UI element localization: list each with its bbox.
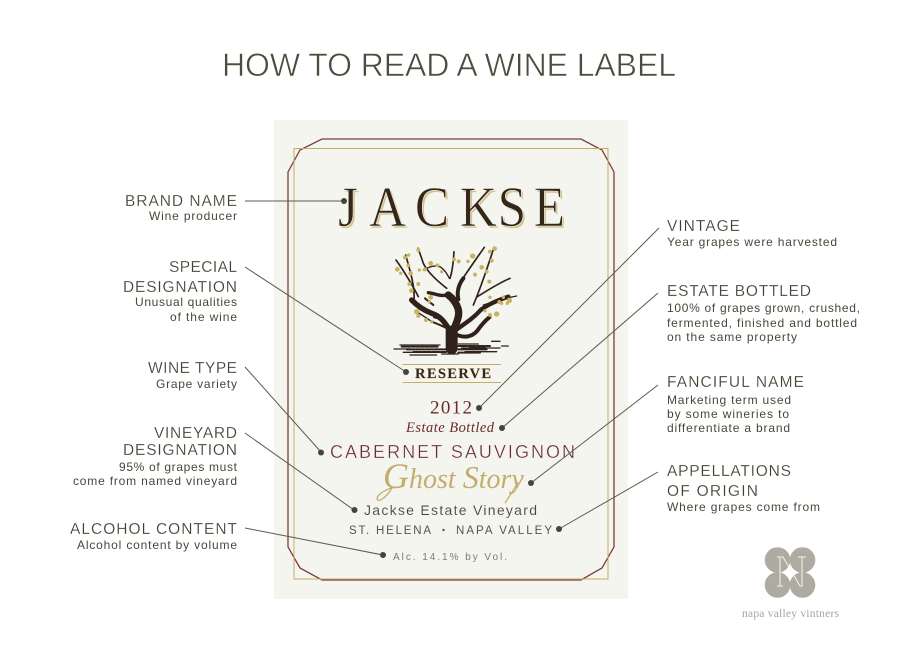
callout: fanciful name (528, 374, 804, 486)
callout: estate bottled: on the same property (667, 330, 797, 344)
callout: vintage (476, 218, 837, 411)
alcohol text: Alc. 14.1% by Vol. (393, 552, 507, 563)
wine type text: CABERNET SAUVIGNON (330, 442, 575, 462)
callout: estate bottled: 100% of grapes grown, crushed, (667, 301, 860, 315)
callout: wine type: Grape variety (156, 377, 237, 391)
callout: estate bottled: ESTATE BOTTLED (667, 283, 811, 300)
callout: vineyard designation: VINEYARD (154, 425, 237, 442)
callout: alcohol content: Alcohol content by volume (77, 538, 237, 552)
callout: alcohol content (70, 521, 386, 558)
callout: wine type (148, 360, 324, 456)
callout: special designation: Unusual qualities (135, 295, 237, 309)
reserve banner: RESERVE (416, 366, 492, 382)
callout: vineyard designation: DESIGNATION (123, 442, 237, 459)
callout: vintage: VINTAGE (667, 218, 740, 235)
brand wordmark: JACKSE (338, 176, 565, 239)
appellation text: ST. HELENA (349, 525, 431, 537)
callout: appellations of origin: APPELLATIONS (667, 463, 791, 480)
callout: fanciful name: by some wineries to (667, 407, 789, 421)
icon: vine tree (394, 246, 517, 355)
callout: vineyard designation: 95% of grapes must (119, 460, 238, 474)
title: HOW TO READ A WINE LABEL (222, 47, 676, 83)
callout: brand name: BRAND NAME (125, 193, 237, 210)
brand wordmark: JACKSE (340, 178, 567, 241)
inner gold border (294, 148, 608, 579)
appellation text: NAPA VALLEY (456, 525, 552, 537)
reserve banner: RESERVE (415, 366, 491, 382)
estate bottled text: Estate Bottled (405, 420, 495, 436)
fanciful name text: Ghost Story (383, 456, 524, 496)
label paper (274, 120, 628, 599)
callout: fanciful name: Marketing term used (667, 393, 791, 407)
callout: vintage: Year grapes were harvested (667, 235, 837, 249)
callout: fanciful name: FANCIFUL NAME (667, 374, 804, 391)
callout: special designation: SPECIAL (169, 259, 237, 276)
logo wordmark: napa valley vintners (742, 608, 840, 620)
callout: brand name (125, 193, 347, 223)
callout: vineyard designation: come from named vineyard (73, 474, 237, 488)
reserve banner (402, 364, 501, 382)
callout: special designation: of the wine (170, 310, 237, 324)
panel: wine label (274, 120, 628, 599)
callout: appellations of origin (556, 463, 820, 532)
callout: appellations of origin: OF ORIGIN (667, 483, 758, 500)
callout: special designation (123, 259, 409, 375)
outer maroon border (288, 139, 614, 580)
callout: wine type: WINE TYPE (148, 360, 237, 377)
vineyard text: Jackse Estate Vineyard (364, 502, 537, 518)
callout: appellations of origin: Where grapes come from (667, 500, 820, 514)
vintage year: 2012 (430, 398, 472, 418)
callout: alcohol content: ALCOHOL CONTENT (70, 521, 238, 538)
callout: vineyard designation (73, 425, 358, 513)
callout: special designation: DESIGNATION (123, 279, 237, 296)
callout: estate bottled (499, 283, 860, 431)
callout: estate bottled: fermented, finished and bottled (667, 316, 857, 330)
callout: brand name: Wine producer (149, 209, 237, 223)
appellation text (349, 525, 552, 537)
icon: napa valley vintners logo (765, 547, 815, 598)
callout: fanciful name: differentiate a brand (667, 421, 790, 435)
